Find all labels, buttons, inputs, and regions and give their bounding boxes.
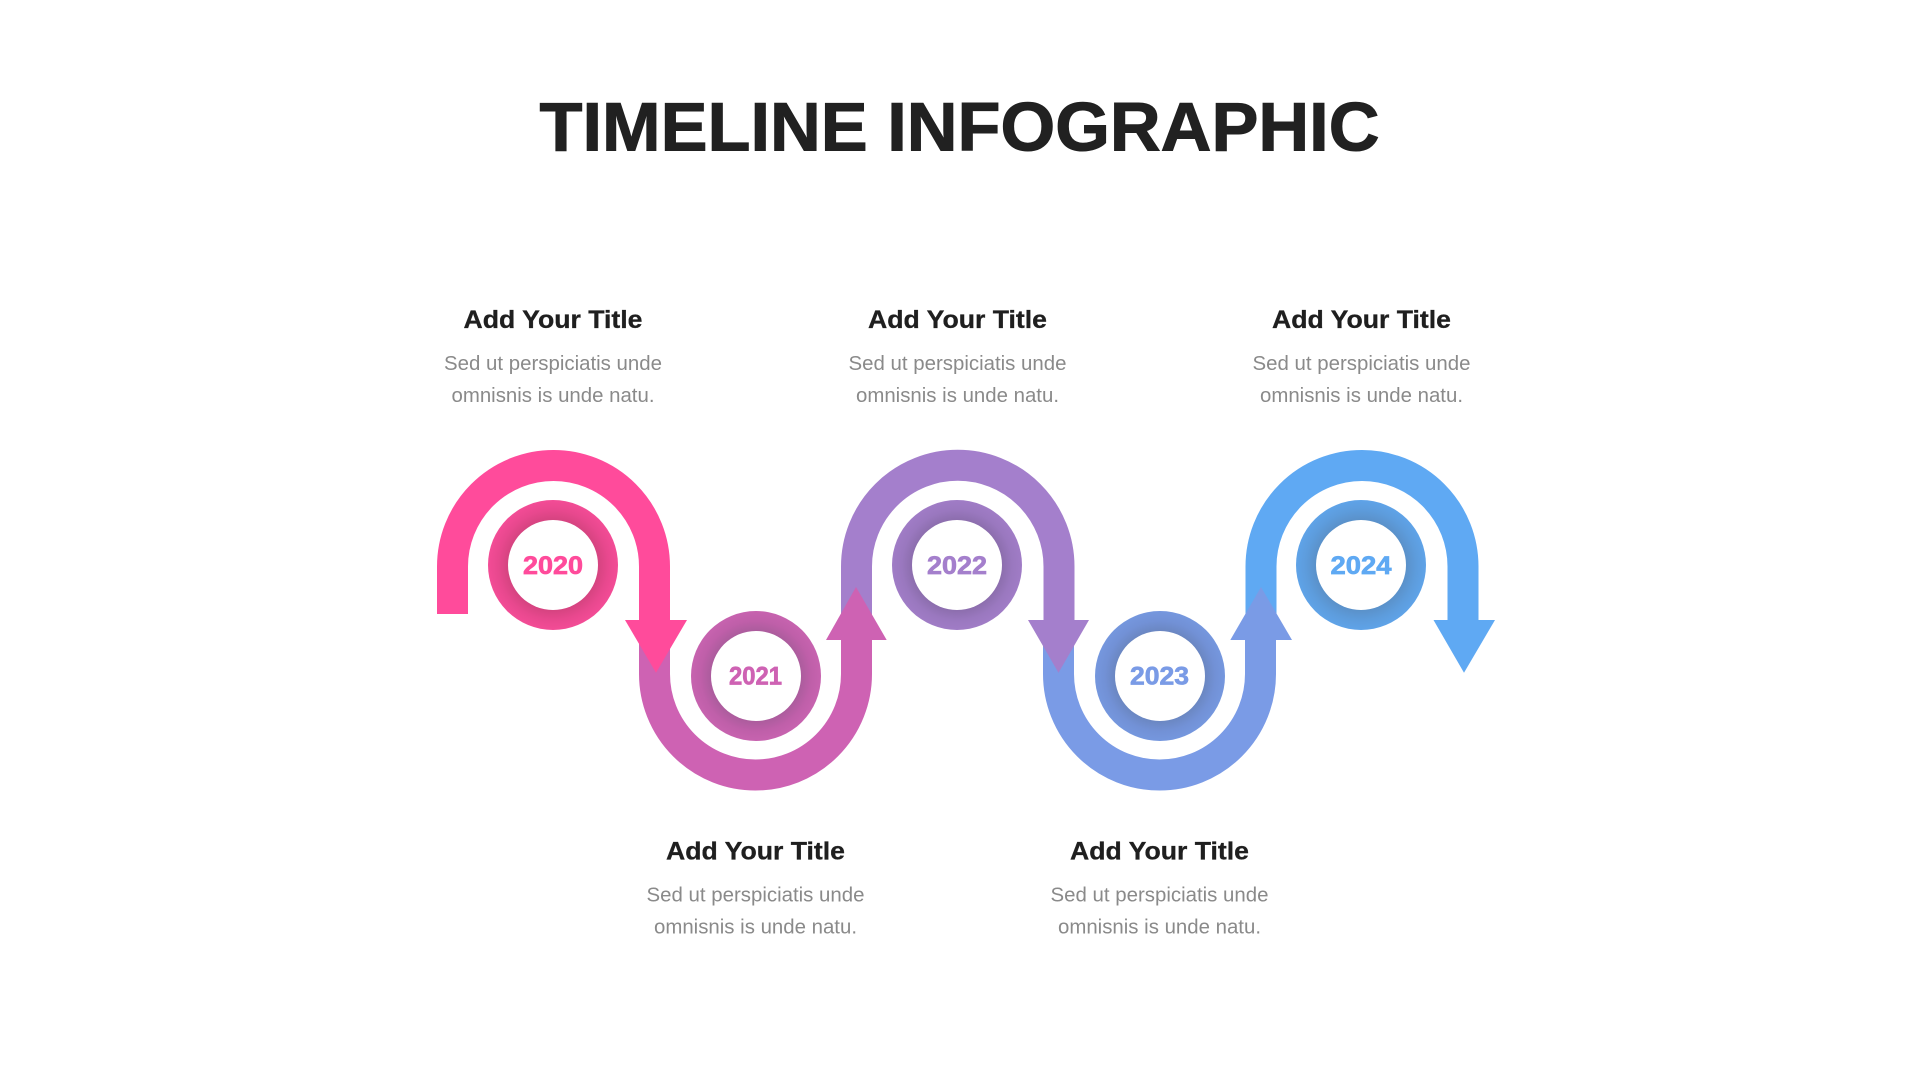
text block: 2020: Add Your Title [464,306,643,334]
text block: 2021: Sed ut perspiciatis unde [646,884,864,906]
text block: 2024: omnisnis is unde natu. [1260,385,1463,407]
text block: 2023: omnisnis is unde natu. [1058,916,1261,938]
badge: 2023: 2023 [1130,662,1189,690]
text block: 2023: Add Your Title [1070,838,1249,866]
arrow: 2024 blue arch [1261,466,1495,673]
text block: 2021: Add Your Title [666,838,845,866]
text block: 2022: Add Your Title [868,306,1047,334]
arrow: 2020 pink arch [452,466,687,673]
arrow: 2021 magenta arch [654,587,887,775]
text block: 2023 [1050,838,1268,938]
text block: 2022 [848,306,1066,407]
text block: 2020: Sed ut perspiciatis unde [444,353,662,375]
text block: 2020 [444,306,662,407]
badge: 2021 [691,611,821,741]
text block: 2022: Sed ut perspiciatis unde [848,353,1066,375]
badge: 2022 [892,500,1022,630]
text block: 2024: Sed ut perspiciatis unde [1252,353,1470,375]
text block: 2024: Add Your Title [1272,306,1451,334]
badge: 2021: 2021 [729,662,782,690]
badge: 2020: 2020 [523,552,583,580]
text block: 2024 [1252,306,1470,407]
text block: 2021 [646,838,864,938]
badge: 2020 [488,500,618,630]
badge: 2024: 2024 [1330,552,1392,580]
badge: 2023 [1095,611,1225,741]
arrow: 2023 periwinkle arch [1058,587,1292,775]
text block: 2023: Sed ut perspiciatis unde [1050,884,1268,906]
badge: 2024 [1296,500,1426,630]
badge: 2022: 2022 [927,552,987,580]
text block: 2022: omnisnis is unde natu. [856,385,1059,407]
text block: 2021: omnisnis is unde natu. [654,916,857,938]
arrow: 2022 purple arch [856,465,1089,673]
text block: 2020: omnisnis is unde natu. [452,385,654,407]
title: TIMELINE INFOGRAPHIC [540,88,1380,166]
